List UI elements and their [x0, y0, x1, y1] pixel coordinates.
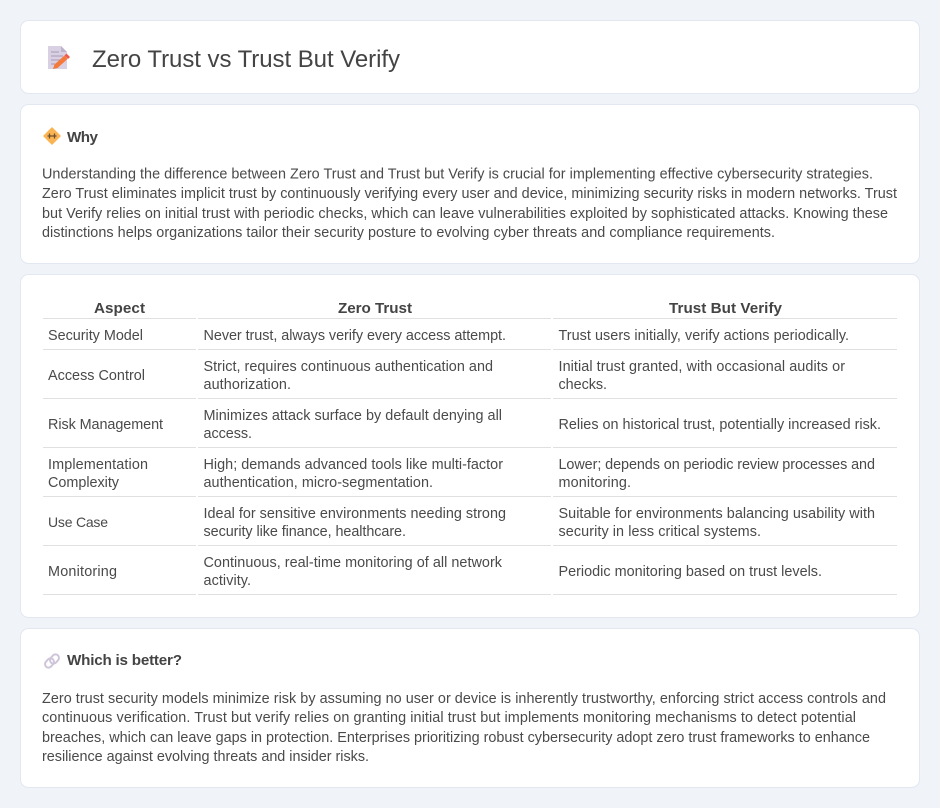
- icon: memo and pencil: [48, 46, 70, 69]
- row: monitoring: [43, 555, 897, 595]
- row: risk management: Minimizes attack surface by default denying all: [204, 408, 502, 424]
- row: security model: Security Model: [48, 328, 143, 344]
- row: implementation complexity: Implementation: [48, 457, 148, 473]
- row: implementation complexity: authentication, micro-segmentation.: [204, 475, 433, 491]
- row: implementation complexity: Complexity: [48, 475, 120, 491]
- panel: title: [20, 20, 920, 94]
- table header: [43, 300, 897, 319]
- which is better paragraph: resilience against evolving threats and insider risks.: [42, 749, 369, 765]
- row: use case: security in less critical systems.: [558, 524, 761, 540]
- which is better paragraph: [42, 691, 886, 765]
- row: use case: Suitable for environments balancing usability with: [558, 506, 875, 522]
- which is better paragraph: Zero trust security models minimize risk by assuming no user or device is inherently trustworthy, enforcing strict access controls and: [42, 691, 886, 707]
- icon: link: [44, 653, 60, 669]
- panel: which is better: [20, 628, 920, 788]
- heading: which is better: Which is better?: [67, 652, 182, 669]
- row: risk management: Risk Management: [48, 417, 163, 433]
- table header: Aspect: [94, 300, 145, 317]
- table header: Zero Trust: [338, 300, 412, 317]
- why paragraph: distinctions helps organizations tailor their security posture to evolving cyber threats and compliance requirements.: [42, 225, 775, 241]
- row: implementation complexity: monitoring.: [558, 475, 631, 491]
- row: risk management: access.: [204, 426, 252, 442]
- why paragraph: but Verify relies on initial trust with periodic checks, which can leave vulnerabilities exploited by sophisticated attacks. Knowing these: [42, 206, 888, 222]
- row: monitoring: Monitoring: [48, 564, 117, 580]
- row: use case: Use Case: [48, 514, 108, 530]
- row: monitoring: Continuous, real-time monitoring of all network: [204, 555, 503, 571]
- row: monitoring: Periodic monitoring based on trust levels.: [558, 564, 822, 580]
- why paragraph: Zero Trust eliminates implicit trust by continuously verifying every user and device, minimizing security risks in modern networks. Trust: [42, 186, 897, 202]
- row: security model: Trust users initially, verify actions periodically.: [558, 328, 849, 344]
- row: access control: Initial trust granted, with occasional audits or: [558, 359, 845, 375]
- row: use case: security like finance, healthcare.: [204, 524, 406, 540]
- panel: why: [20, 104, 920, 264]
- row: use case: Ideal for sensitive environments needing strong: [204, 506, 506, 522]
- row: risk management: [43, 408, 897, 448]
- row: access control: Strict, requires continuous authentication and: [204, 359, 493, 375]
- row: risk management: Relies on historical trust, potentially increased risk.: [558, 417, 881, 433]
- row: access control: authorization.: [204, 377, 291, 393]
- row: access control: checks.: [558, 377, 607, 393]
- table header: Trust But Verify: [669, 300, 783, 317]
- heading: why: Why: [67, 129, 99, 146]
- row: access control: [43, 359, 897, 399]
- row: use case: [43, 506, 897, 546]
- panel: comparison table: [20, 274, 920, 618]
- row: security model: [43, 328, 897, 350]
- row: access control: Access Control: [48, 368, 145, 384]
- which is better paragraph: breaches, which can leave gaps in protection. Enterprises prioritizing robust cybersecurity adopt zero trust frameworks to enhance: [42, 730, 870, 746]
- why paragraph: [42, 166, 897, 241]
- row: implementation complexity: High; demands advanced tools like multi-factor: [204, 457, 503, 473]
- row: monitoring: activity.: [204, 573, 251, 589]
- which is better paragraph: continuous verification. Trust but verify relies on granting initial trust but implements monitoring mechanisms to detect potential: [42, 710, 856, 726]
- row: implementation complexity: [43, 457, 897, 497]
- why paragraph: Understanding the difference between Zero Trust and Trust but Verify is crucial for implementing effective cybersecurity strategies.: [42, 166, 873, 182]
- title text: Zero Trust vs Trust But Verify: [92, 46, 400, 73]
- row: implementation complexity: Lower; depends on periodic review processes and: [558, 457, 875, 473]
- row: security model: Never trust, always verify every access attempt.: [204, 328, 506, 344]
- icon: warning diamond: [44, 128, 60, 144]
